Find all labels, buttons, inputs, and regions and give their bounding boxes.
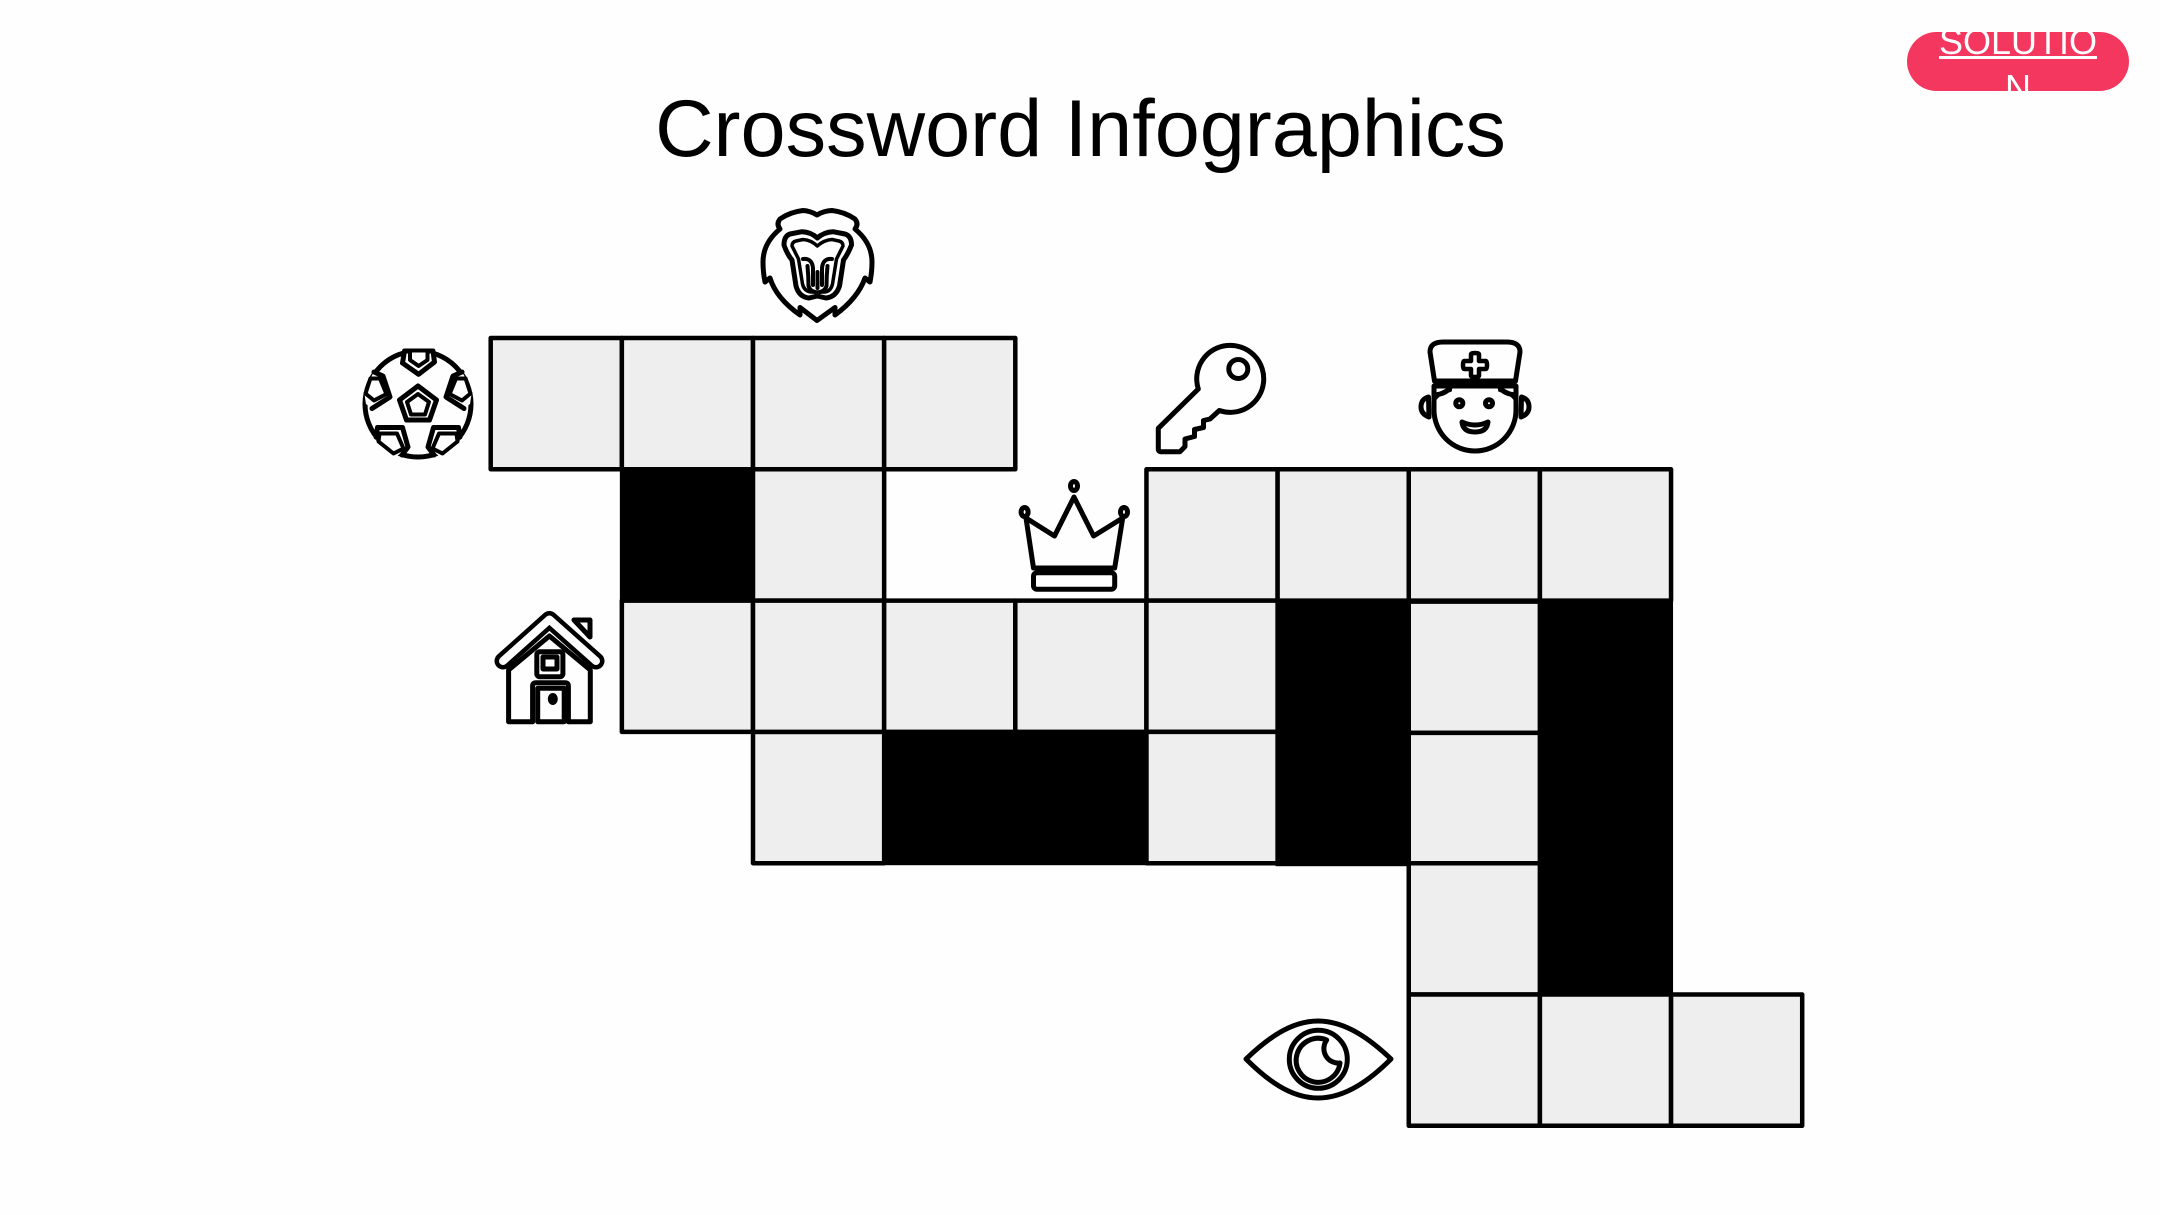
pentagon patch bottom right [428,428,460,457]
roof [503,620,596,661]
icon: house [503,620,596,722]
icon: eye [1246,1021,1391,1098]
word column lion [753,469,884,863]
word column nurse [1409,602,1540,994]
pentagon patch bottom left [376,428,408,457]
word row 2 right [1146,469,1671,601]
word row 3 [622,601,1278,863]
icon: soccer ball [364,350,472,457]
icon: crown [1021,482,1128,589]
pentagon patch left [364,372,390,408]
pentagon patch right [446,372,472,408]
word row 1 [491,338,1015,469]
title: Crossword Infographics [655,84,1506,174]
icon: lion [763,210,872,320]
crossword grid [491,338,1802,1126]
solution button [1907,32,2129,91]
walls, door and window [509,636,590,722]
black cells [620,467,1673,996]
pentagon patch center [400,386,436,420]
icon: key [1158,345,1264,452]
word row 6 [1409,994,1802,1126]
chimney [574,620,590,637]
icon: nurse [1421,342,1529,451]
pentagon patch top [402,351,434,374]
